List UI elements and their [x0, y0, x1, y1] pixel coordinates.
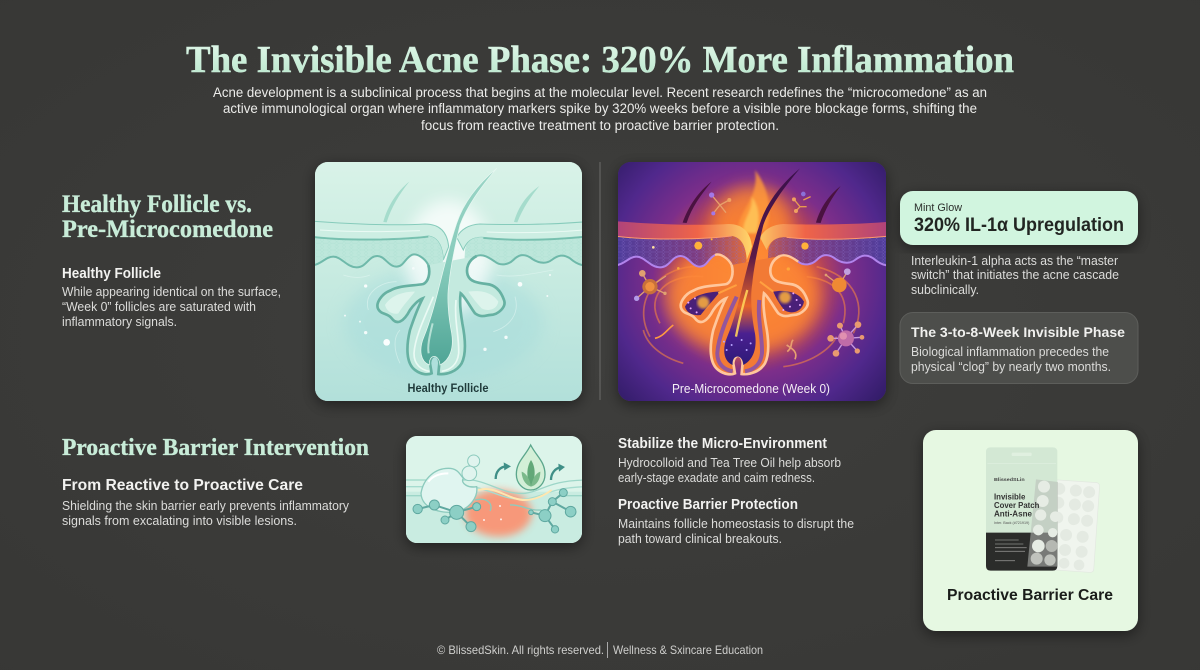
body: protection: Maintains follicle homeostasis to disrupt the	[618, 517, 854, 531]
body: stabilize: early-stage exadate and caim redness.	[618, 471, 815, 485]
arrow: upward left	[496, 462, 511, 479]
panel: healthy follicle illustration	[310, 162, 587, 401]
section heading: Proactive Barrier Intervention	[62, 435, 369, 461]
product: blister sheet and pouch: BlissedSLin	[994, 477, 1025, 482]
healthy follicle subheading: Healthy Follicle	[62, 266, 161, 282]
sparkles	[344, 267, 551, 351]
image label: pre-microcomedone: Pre-Microcomedone (Week 0)	[672, 382, 830, 396]
intro paragraph	[213, 85, 987, 133]
product label: Proactive Barrier Care	[947, 587, 1113, 604]
subheading: stabilize: Stabilize the Micro-Environment	[618, 436, 827, 452]
intro paragraph: active immunological organ where inflammatory markers spike by 320% weeks before a visible pore blockage forms, shifting the	[223, 101, 977, 116]
callout: 320% IL-1α upregulation	[900, 191, 1138, 245]
panel: pre-microcomedone illustration	[614, 162, 890, 408]
intro paragraph: focus from reactive treatment to proactive barrier protection.	[421, 118, 779, 133]
glowing spots	[652, 238, 809, 271]
intro paragraph: Acne development is a subclinical process that begins at the molecular level. Recent research redefines the “microcomedone” as an	[213, 85, 987, 100]
body: stabilize: Hydrocolloid and Tea Tree Oil help absorb	[618, 456, 841, 470]
body text	[62, 499, 350, 528]
body: protection	[618, 517, 854, 546]
product: blister sheet and pouch: Anti-Asne	[994, 510, 1033, 519]
product: blister sheet and pouch: Cover Patch	[994, 501, 1039, 510]
molecule: top left	[709, 192, 731, 215]
section: proactive barrier intervention text	[62, 435, 369, 528]
body text: Shielding the skin barrier early prevents inflammatory	[62, 499, 350, 513]
section heading: Healthy Follicle vs.	[62, 191, 252, 218]
subheading: from reactive to proactive: From Reactive to Proactive Care	[62, 477, 303, 494]
molecule: left	[634, 270, 667, 301]
footer: © BlissedSkin. All rights reserved.	[437, 643, 604, 657]
callout: 320% IL-1α upregulation: Mint Glow	[914, 202, 962, 214]
divider	[599, 162, 601, 400]
image label: healthy follicle: Healthy Follicle	[408, 381, 489, 395]
section heading	[62, 191, 273, 243]
hydrocolloid patch blob	[421, 455, 480, 512]
subheading: protection: Proactive Barrier Protection	[618, 497, 798, 513]
molecule: lower right	[827, 321, 864, 357]
card: invisible phase: physical “clog” by nearly two months.	[911, 360, 1111, 374]
title: The Invisible Acne Phase: 320% More Inflammation	[186, 39, 1014, 81]
healthy follicle body: While appearing identical on the surface,	[62, 285, 281, 299]
card: invisible phase: Biological inflammation precedes the	[911, 345, 1109, 359]
product: blister sheet and pouch	[986, 447, 1100, 573]
panel: product card	[923, 430, 1138, 631]
IL-1α description: subclinically.	[911, 283, 979, 297]
IL-1α description: switch” that initiates the acne cascade	[911, 268, 1119, 282]
product: blister sheet and pouch: Invisible	[994, 492, 1026, 501]
body: stabilize	[618, 456, 841, 485]
section heading: Pre-Microcomedone	[62, 216, 273, 243]
product: blister sheet and pouch: Inter. Back (#721919)	[994, 521, 1029, 525]
body: protection: path toward clinical breakouts.	[618, 532, 782, 546]
card: invisible phase	[900, 312, 1138, 384]
molecule: top right	[792, 192, 811, 213]
footer: Wellness & Sxincare Education	[613, 643, 763, 657]
molecule cluster right	[529, 489, 576, 533]
IL-1α description: Interleukin-1 alpha acts as the “master	[911, 254, 1118, 268]
molecule: right	[825, 268, 851, 292]
arrow: upward right	[551, 464, 565, 480]
panel: barrier patch illustration	[402, 432, 588, 548]
leaf drop icon	[516, 445, 545, 490]
section: stabilize and protection text	[618, 436, 854, 546]
body text: signals from excalating into visible lesions.	[62, 514, 297, 528]
section: healthy follicle vs pre-microcomedone text	[62, 191, 281, 329]
healthy follicle body	[62, 285, 281, 329]
callout: 320% IL-1α upregulation: 320% IL-1α Upregulation	[914, 215, 1124, 236]
IL-1α description	[911, 254, 1119, 297]
healthy follicle body: inflammatory signals.	[62, 315, 177, 329]
card: invisible phase: The 3-to-8-Week Invisible Phase	[911, 324, 1125, 340]
healthy follicle body: “Week 0” follicles are saturated with	[62, 300, 256, 314]
footer	[437, 642, 763, 658]
molecule cluster left	[413, 500, 481, 532]
flame	[712, 170, 792, 260]
